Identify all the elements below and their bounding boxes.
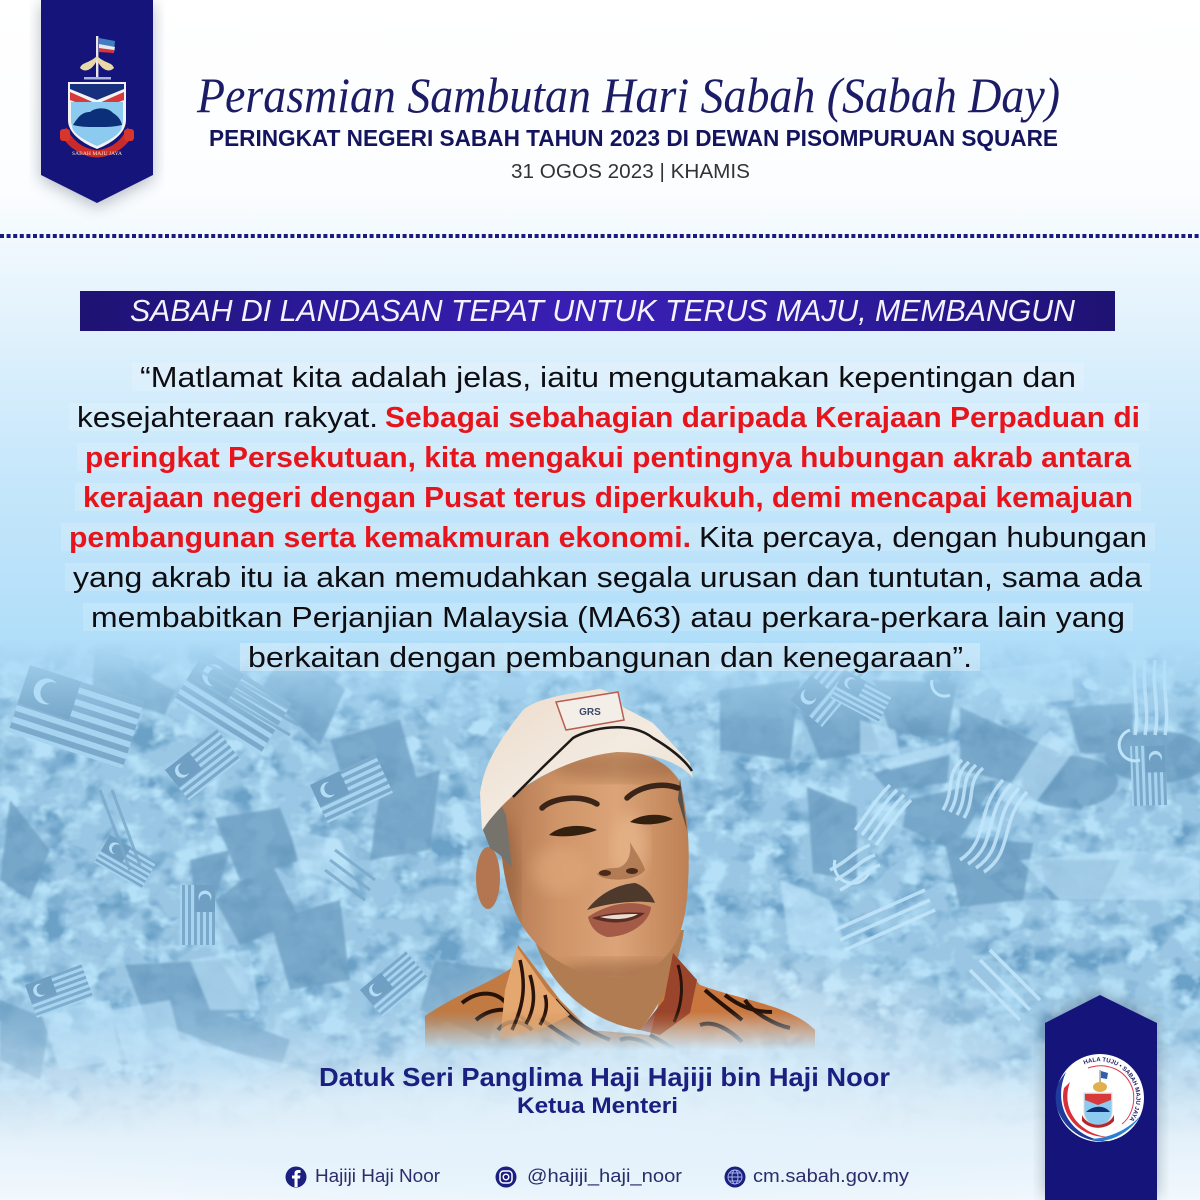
portrait: Chief Minister in cap and batik shirt <box>425 689 815 1050</box>
icon: Sabah crest: SABAH MAJU JAYA <box>72 151 122 157</box>
brows <box>542 785 678 808</box>
background: crowd waving flags <box>0 630 1200 1140</box>
cap <box>480 689 693 830</box>
icon: Hala Tuju Sabah Maju Jaya badge <box>1056 1054 1144 1142</box>
ribbon: top-left with state crest <box>41 0 153 207</box>
title: script heading: Perasmian Sambutan Hari Sabah (Sabah Day) <box>196 67 1060 123</box>
moustache <box>587 883 655 910</box>
quote text block: pembangunan serta kemakmuran ekonomi. <box>69 522 691 554</box>
quote text block: peringkat Persekutuan, kita mengakui pentingnya hubungan akrab antara <box>85 442 1132 474</box>
quote text block: Sebagai sebahagian daripada Kerajaan Perpaduan di <box>385 402 1140 434</box>
name: Datuk Seri Panglima Haji Hajiji bin Haji Noor <box>319 1062 890 1092</box>
quote text block: berkaitan dengan pembangunan dan kenegaraan”. <box>248 642 972 674</box>
icon: Sabah crest <box>60 36 134 157</box>
face shading <box>502 752 677 977</box>
quote text block: kerajaan negeri dengan Pusat terus diperkukuh, demi mencapai kemajuan <box>83 482 1133 514</box>
neck <box>532 930 684 1030</box>
headline banner: SABAH DI LANDASAN TEPAT UNTUK TERUS MAJU, MEMBANGUN <box>130 293 1076 328</box>
social: facebook: Hajiji Haji Noor <box>315 1166 440 1186</box>
eyes <box>549 815 673 836</box>
cap logo <box>556 692 624 730</box>
quote text block: Kita percaya, dengan hubungan <box>699 522 1147 554</box>
quote text block: membabitkan Perjanjian Malaysia (MA63) atau perkara-perkara lain yang <box>91 602 1125 634</box>
mouth <box>588 903 651 937</box>
quote text block: kesejahteraan rakyat. <box>77 402 378 434</box>
nose <box>597 842 645 880</box>
quote text block <box>61 362 1155 674</box>
ear <box>476 847 500 909</box>
batik shirt <box>425 945 815 1050</box>
shirt collars <box>500 947 697 1040</box>
social: instagram: @hajiji_haji_noor <box>527 1166 682 1187</box>
cap logo: GRS <box>579 707 601 718</box>
subtitle: PERINGKAT NEGERI SABAH TAHUN 2023 DI DEWAN PISOMPURUAN SQUARE <box>209 125 1058 151</box>
face <box>500 752 689 977</box>
ribbon: bottom-right with Hala Tuju badge <box>1036 986 1166 1200</box>
icon: Hala Tuju Sabah Maju Jaya badge: HALA TUJU • SABAH MAJU JAYA <box>1083 1057 1140 1121</box>
social: instagram <box>496 1166 682 1188</box>
hair <box>483 803 512 868</box>
quote text block: yang akrab itu ia akan memudahkan segala urusan dan tuntutan, sama ada <box>73 562 1142 594</box>
dotted divider <box>0 234 1200 238</box>
quote text block: “Matlamat kita adalah jelas, iaitu mengutamakan kepentingan dan <box>140 362 1076 394</box>
social: website: cm.sabah.gov.my <box>753 1166 909 1186</box>
job title: Ketua Menteri <box>517 1093 678 1118</box>
date line: 31 OGOS 2023 | KHAMIS <box>511 161 750 183</box>
